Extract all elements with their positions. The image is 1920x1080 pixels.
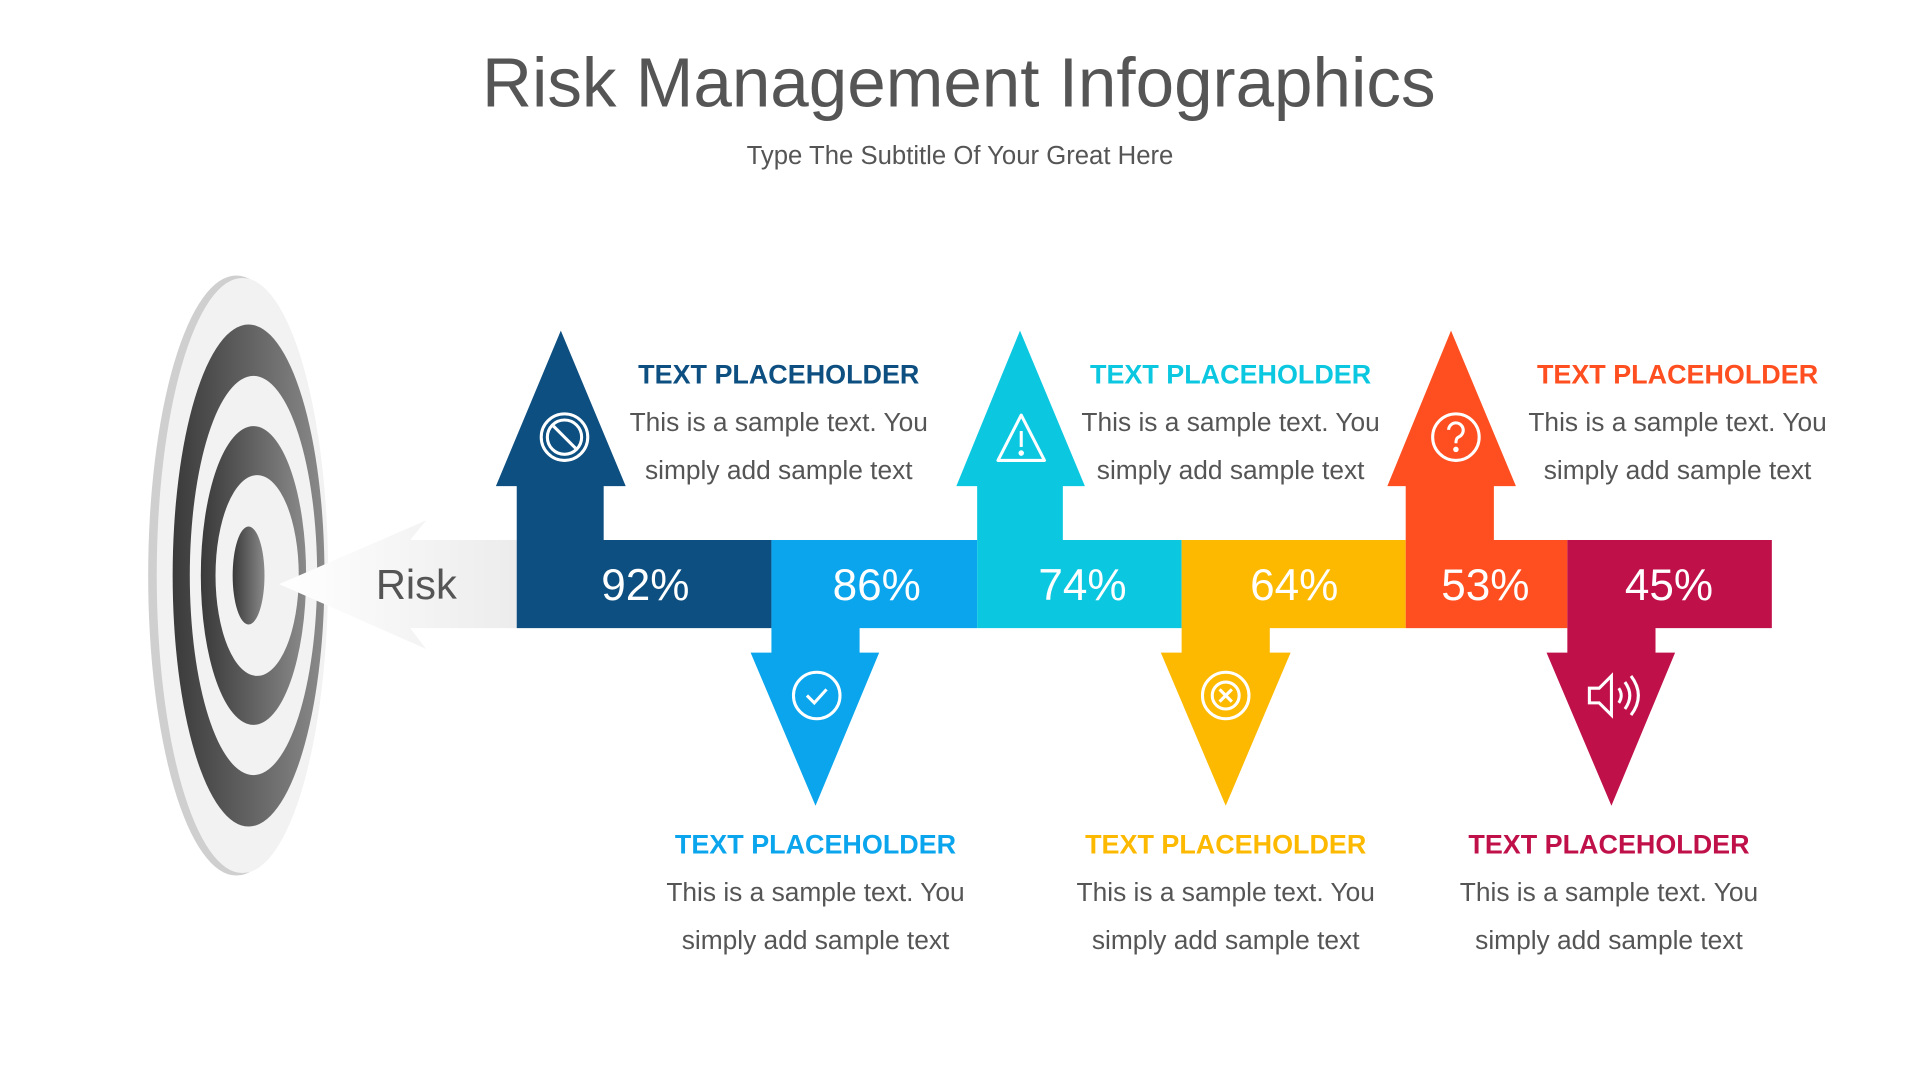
arrow: 53% up: 53% [1441, 561, 1529, 610]
icon: target [148, 276, 328, 876]
text block: top 3: This is a sample text. You [1528, 407, 1827, 437]
text block: bottom 3 [1460, 829, 1758, 955]
text block: bottom 2: This is a sample text. You [1077, 877, 1375, 907]
arrow: 86% down: 86% [833, 561, 921, 610]
text block: top 1 [630, 359, 928, 485]
arrow: risk: Risk [376, 561, 457, 608]
title: Risk Management Infographics [482, 44, 1436, 122]
text block: top 3: TEXT PLACEHOLDER [1537, 359, 1818, 389]
text block: bottom 3: TEXT PLACEHOLDER [1468, 829, 1750, 859]
text block: bottom 2: simply add sample text [1092, 925, 1360, 955]
arrow: 45% down: 45% [1625, 561, 1713, 610]
text block: bottom 1: This is a sample text. You [666, 877, 965, 907]
subtitle: Type The Subtitle Of Your Great Here [747, 142, 1173, 170]
arrow: 64% down [1161, 540, 1406, 806]
text block: top 1: TEXT PLACEHOLDER [638, 359, 919, 389]
text block: top 1: This is a sample text. You [630, 407, 928, 437]
arrow: 86% down [751, 540, 977, 806]
text block: top 2: TEXT PLACEHOLDER [1090, 359, 1371, 389]
arrow: 74% up [956, 331, 1182, 628]
arrow: 53% up [1387, 331, 1567, 628]
arrow: 45% down [1547, 540, 1772, 806]
text block: top 2: simply add sample text [1097, 455, 1365, 485]
arrow: 92% up [496, 331, 771, 628]
text block: bottom 2 [1077, 829, 1375, 955]
text block: bottom 2: TEXT PLACEHOLDER [1085, 829, 1366, 859]
text block: top 1: simply add sample text [645, 455, 913, 485]
arrow: risk [279, 520, 517, 649]
arrow: 92% up: 92% [601, 561, 689, 610]
text block: bottom 3: simply add sample text [1475, 925, 1743, 955]
text block: bottom 3: This is a sample text. You [1460, 877, 1758, 907]
arrow: 74% up: 74% [1038, 561, 1127, 610]
arrow: 64% down: 64% [1250, 561, 1338, 610]
text block: top 3: simply add sample text [1544, 455, 1812, 485]
text block: bottom 1: simply add sample text [682, 925, 950, 955]
text block: top 2: This is a sample text. You [1081, 407, 1380, 437]
text block: bottom 1 [666, 829, 965, 955]
text block: top 3 [1528, 359, 1827, 485]
text block: bottom 1: TEXT PLACEHOLDER [675, 829, 956, 859]
text block: top 2 [1081, 359, 1380, 485]
